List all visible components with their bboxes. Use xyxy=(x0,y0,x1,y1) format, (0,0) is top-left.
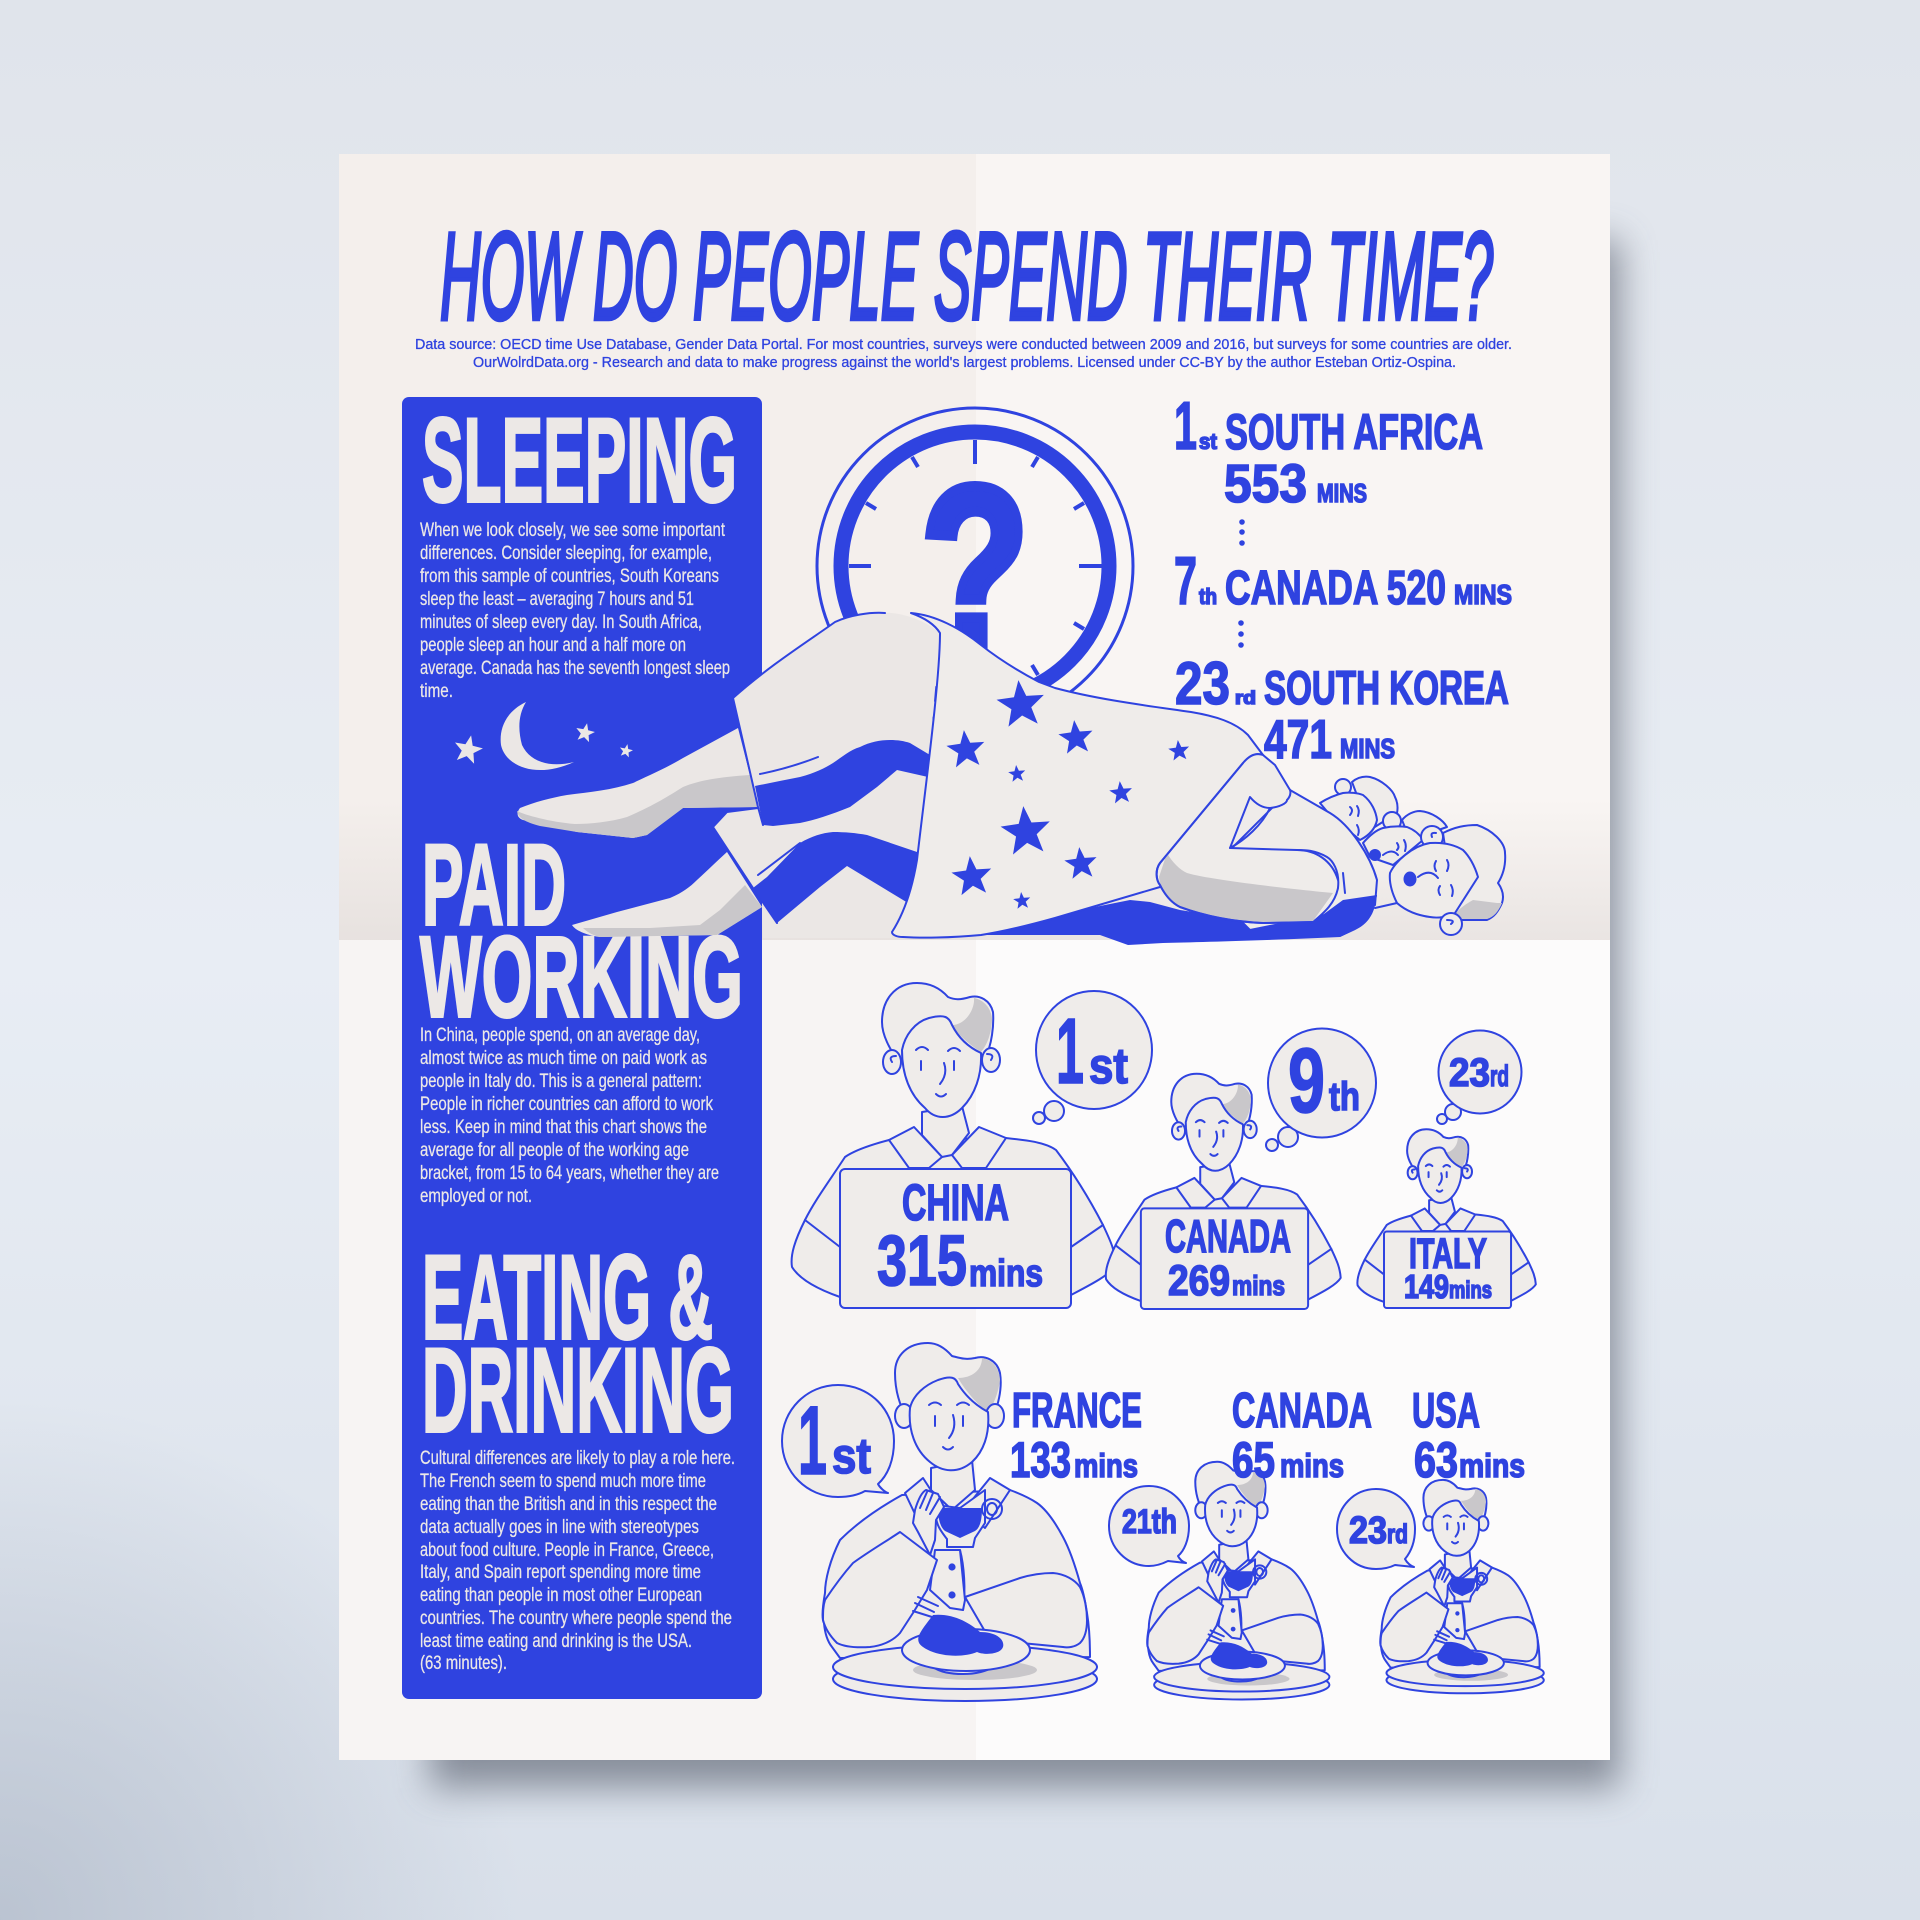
eating and drinking body text: (63 minutes). xyxy=(420,1653,507,1674)
figure: canada diner xyxy=(1109,1384,1372,1699)
figure: china worker xyxy=(792,983,1152,1308)
data source line one: Data source: OECD time Use Database, Gender Data Portal. For most countries, surveys were conducted between 2009 and 2016, but surveys for some countries are older. xyxy=(415,337,1512,353)
rank 1st south africa: SOUTH AFRICA xyxy=(1225,404,1483,460)
thought bubble 23rd xyxy=(1437,1030,1522,1124)
eating and drinking body text: eating than people in most other European xyxy=(420,1585,702,1606)
rank 1st south africa: st xyxy=(1199,429,1218,454)
rank 7th canada xyxy=(1174,543,1512,619)
usa label: mins xyxy=(1459,1447,1525,1484)
usa label: USA xyxy=(1412,1384,1480,1438)
italy sign text: 149 xyxy=(1404,1268,1449,1305)
paid working body text: In China, people spend, on an average day, xyxy=(420,1025,700,1046)
upper blue inner leg xyxy=(755,740,930,826)
eating and drinking body text: eating than the British and in this respect the xyxy=(420,1494,717,1515)
paid working body text: average for all people of the working age xyxy=(420,1140,689,1161)
thought bubble 1st: 1 xyxy=(1056,999,1084,1103)
icon: clock with question mark xyxy=(817,408,1133,724)
eating and drinking body text: countries. The country where people spend the xyxy=(420,1608,732,1629)
eating and drinking body text: Cultural differences are likely to play a role here. xyxy=(420,1448,735,1469)
blue back shadow xyxy=(1300,895,1377,937)
eating and drinking body text xyxy=(420,1448,735,1674)
rank 23rd south korea xyxy=(1175,650,1509,770)
canada label: CANADA xyxy=(1232,1384,1372,1438)
panel: sleeping rankings xyxy=(1174,388,1512,770)
thought bubble 23rd: rd xyxy=(1490,1060,1509,1093)
sleeping body text: average. Canada has the seventh longest sleep xyxy=(420,658,730,679)
blue ground shadow xyxy=(981,895,1377,945)
upper foot xyxy=(517,728,758,838)
eating and drinking body text: least time eating and drinking is the USA. xyxy=(420,1631,692,1652)
speech bubble 21th xyxy=(1109,1486,1189,1566)
china sign text xyxy=(877,1174,1043,1301)
dots xyxy=(1238,620,1244,648)
starry blanket xyxy=(892,613,1290,938)
speech bubble 1st: st xyxy=(832,1428,871,1484)
paper drop shadow xyxy=(430,240,1620,1788)
rank 7th canada: CANADA 520 xyxy=(1225,562,1446,615)
rank 7th canada: 7 xyxy=(1174,543,1197,619)
sleeping body text: people sleep an hour and a half more on xyxy=(420,635,686,656)
sleeping body text xyxy=(420,520,730,702)
blanket legs: cream shorts xyxy=(713,613,940,938)
rank 1st south africa: 1 xyxy=(1174,388,1197,464)
thought bubble 23rd: 23 xyxy=(1449,1051,1490,1095)
china sign text: mins xyxy=(969,1253,1043,1295)
rank 7th canada: th xyxy=(1199,584,1217,609)
rank 1st south africa: MINS xyxy=(1317,478,1367,508)
rank 1st south africa: 553 xyxy=(1224,454,1307,514)
heading: eating and: EATING & xyxy=(422,1230,713,1364)
figure: italy worker xyxy=(1357,1030,1536,1308)
france label xyxy=(1010,1384,1142,1488)
italy sign text: ITALY xyxy=(1409,1230,1487,1278)
france label: 133 xyxy=(1010,1432,1071,1488)
usa label: 63 xyxy=(1414,1432,1458,1488)
thought bubble 1st: st xyxy=(1089,1038,1128,1094)
rank 23rd south korea: 471 xyxy=(1264,708,1332,770)
speech bubble 23rd: rd xyxy=(1387,1519,1408,1549)
paid working body text: less. Keep in mind that this chart shows the xyxy=(420,1117,707,1138)
canada sign text: 269 xyxy=(1168,1257,1230,1305)
figure: france diner xyxy=(782,1343,1142,1701)
sleeping body text: differences. Consider sleeping, for example, xyxy=(420,543,712,564)
eating and drinking body text: Italy, and Spain report spending more time xyxy=(420,1562,701,1583)
sleeping body text: sleep the least – averaging 7 hours and 51 xyxy=(420,589,694,610)
paid working body text: people in Italy do. This is a general pattern: xyxy=(420,1071,702,1092)
heading: sleeping: SLEEPING xyxy=(422,394,737,528)
italy sign text xyxy=(1404,1230,1492,1305)
sleeping body text: minutes of sleep every day. In South Africa, xyxy=(420,612,702,633)
rank 23rd south korea: 23 xyxy=(1175,650,1230,717)
speech bubble 1st xyxy=(782,1385,894,1497)
speech bubble 23rd xyxy=(1337,1489,1415,1569)
rank 1st south africa xyxy=(1174,388,1483,514)
back of sleeper xyxy=(1200,790,1377,930)
front head xyxy=(1390,825,1505,935)
heading: working: WORKING xyxy=(420,914,743,1042)
china sign text: 315 xyxy=(877,1222,967,1301)
thought bubble 9th xyxy=(1266,1028,1376,1151)
back heads xyxy=(1320,777,1447,865)
dots xyxy=(1239,519,1245,546)
rank 7th canada: MINS xyxy=(1454,579,1512,610)
usa label xyxy=(1412,1384,1525,1488)
heading: drinking: DRINKING xyxy=(422,1324,734,1458)
canada label: 65 xyxy=(1232,1432,1275,1488)
canada sign text: CANADA xyxy=(1165,1210,1291,1262)
speech bubble 23rd: 23 xyxy=(1349,1510,1387,1552)
speech bubble 1st: 1 xyxy=(798,1386,827,1495)
lower blue inner leg xyxy=(753,832,920,923)
curled arm and knee xyxy=(1157,754,1345,923)
paid working body text: bracket, from 15 to 64 years, whether they are xyxy=(420,1163,719,1184)
sleeping body text: from this sample of countries, South Koreans xyxy=(420,566,719,587)
illustration: sleeping person under starry blanket xyxy=(517,613,1505,945)
icon: clock with question mark: ? xyxy=(921,439,1029,698)
crease lines xyxy=(758,757,818,875)
eating and drinking body text: The French seem to spend much more time xyxy=(420,1471,706,1492)
thought bubble 9th: 9 xyxy=(1288,1030,1325,1132)
rank 23rd south korea: rd xyxy=(1235,688,1256,708)
heading: paid: PAID xyxy=(422,822,566,950)
france label: mins xyxy=(1074,1447,1138,1484)
paid working body text: employed or not. xyxy=(420,1186,532,1207)
thought bubble 1st xyxy=(1033,991,1152,1124)
france label: FRANCE xyxy=(1012,1384,1142,1438)
eating and drinking body text: about food culture. People in France, Greece, xyxy=(420,1540,714,1561)
speech bubble 21th: 21th xyxy=(1122,1503,1177,1541)
panel: blue text column xyxy=(402,394,762,1699)
poster paper with fold shading xyxy=(339,154,1610,1760)
canada label xyxy=(1232,1384,1372,1488)
sleeping body text: time. xyxy=(420,681,453,702)
italy sign text: mins xyxy=(1449,1277,1492,1304)
sleeping body text: When we look closely, we see some important xyxy=(420,520,726,541)
thought bubble 9th: th xyxy=(1329,1075,1360,1119)
rank 23rd south korea: SOUTH KOREA xyxy=(1264,661,1509,714)
canada sign text: mins xyxy=(1232,1270,1285,1301)
icon: moon and stars xyxy=(452,702,634,770)
data source line two: OurWolrdData.org - Research and data to make progress against the world's largest problems. Licensed under CC-BY by the author Esteban Ortiz-Ospina. xyxy=(473,355,1456,371)
paid working body text: almost twice as much time on paid work as xyxy=(420,1048,707,1069)
blanket stars xyxy=(945,678,1190,909)
canada sign text xyxy=(1165,1210,1291,1305)
paid working body text: People in richer countries can afford to work xyxy=(420,1094,713,1115)
rank 23rd south korea: MINS xyxy=(1340,733,1395,764)
figure: usa diner xyxy=(1337,1384,1544,1693)
lower foot xyxy=(572,852,762,937)
china sign text: CHINA xyxy=(902,1174,1009,1231)
canada label: mins xyxy=(1280,1447,1344,1484)
figure: canada worker xyxy=(1106,1028,1376,1309)
eating and drinking body text: data actually goes in line with stereotypes xyxy=(420,1517,699,1538)
neck xyxy=(1375,903,1397,908)
paid working body text xyxy=(420,1025,719,1207)
